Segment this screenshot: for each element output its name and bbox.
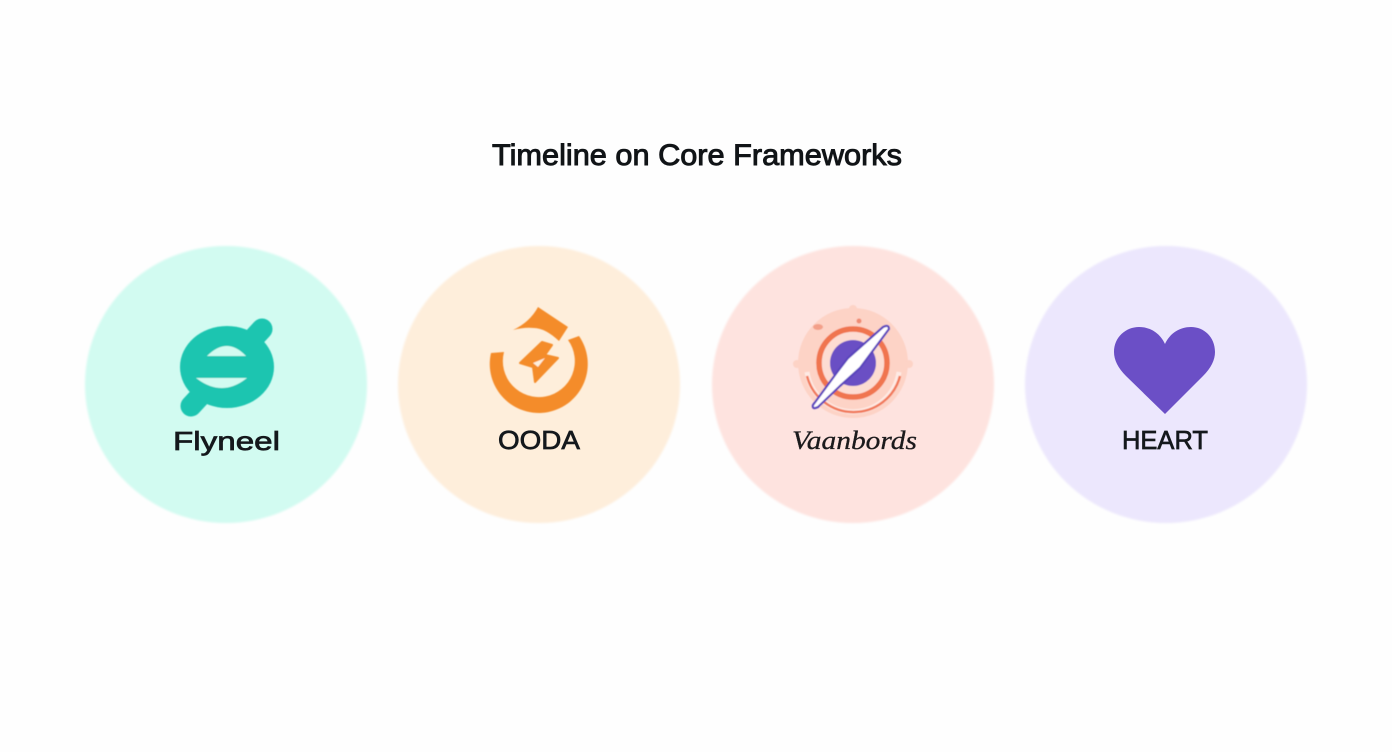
panel: Vaanbords (712, 246, 994, 523)
title: Timeline on Core Frameworks (492, 139, 902, 172)
label: HEART: HEART (1122, 425, 1208, 455)
icon: compass needle (793, 305, 913, 418)
icon: orange loop with bolt (490, 307, 588, 413)
label: Flyneel: Flyneel (173, 426, 280, 456)
icon: teal swirl (180, 326, 274, 408)
panel: Flyneel (85, 246, 367, 523)
panel: OODA (398, 246, 680, 523)
label: OODA: OODA (498, 425, 581, 455)
panel: HEART (1025, 246, 1307, 523)
label: Vaanbords: Vaanbords (792, 426, 917, 455)
icon: heart (1114, 327, 1215, 414)
